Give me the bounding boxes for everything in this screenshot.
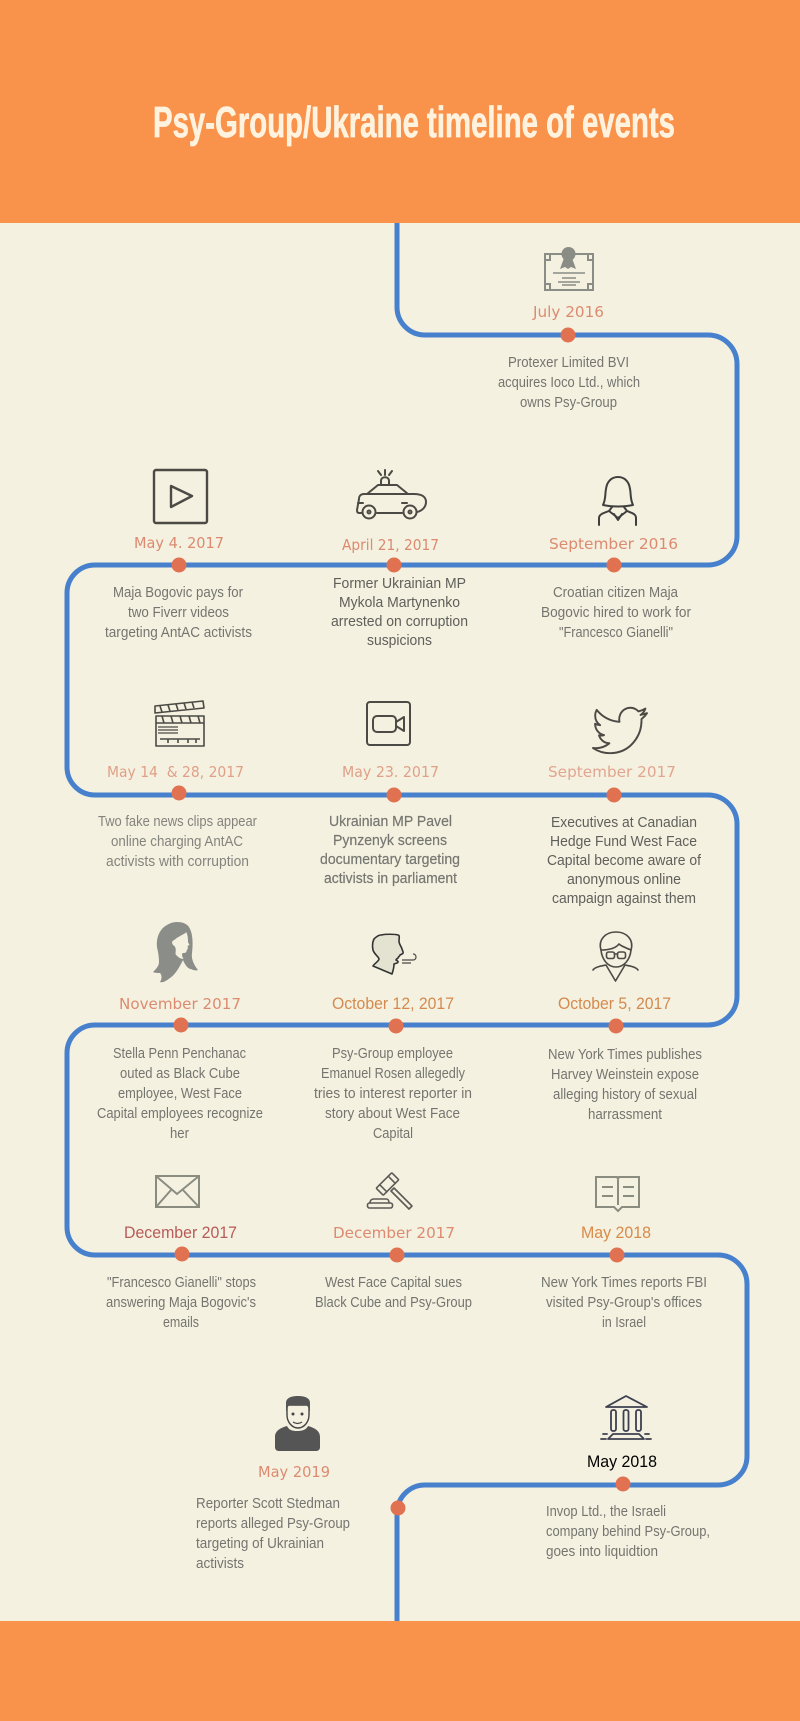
description (314, 1046, 472, 1142)
date: May 2019 (258, 1463, 330, 1481)
description: her (170, 1126, 189, 1142)
description (98, 814, 257, 870)
marker (606, 788, 622, 802)
event: October 12, 2017 (314, 934, 472, 1142)
date: May 2018 (587, 1453, 657, 1471)
icon: envelope (156, 1176, 199, 1207)
marker (174, 1018, 188, 1032)
description: Capital (373, 1126, 413, 1142)
description (331, 576, 468, 649)
description: Two fake news clips appear (98, 814, 257, 830)
date: October 12, 2017 (332, 995, 454, 1013)
icon: open book (596, 1177, 639, 1211)
description: reports alleged Psy-Group (196, 1516, 350, 1532)
description: Harvey Weinstein expose (551, 1067, 699, 1083)
date: July 2016 (532, 303, 604, 321)
marker (174, 1246, 190, 1262)
event: May 14 & 28, 2017 (98, 701, 257, 870)
description (548, 1047, 702, 1123)
description: targeting of Ukrainian (196, 1536, 324, 1552)
marker (608, 1018, 624, 1034)
description (546, 1504, 710, 1560)
description: campaign against them (552, 891, 696, 907)
icon: clapperboard (155, 701, 204, 746)
date: May 14 & 28, 2017 (107, 763, 244, 781)
description (320, 814, 460, 887)
description: Croatian citizen Maja (553, 585, 679, 601)
description: Ukrainian MP Pavel (329, 814, 452, 830)
description: anonymous online (567, 872, 681, 888)
description: suspicions (367, 633, 432, 649)
marker (172, 558, 186, 572)
description: Protexer Limited BVI (508, 355, 629, 371)
icon: police car (357, 470, 426, 518)
description: acquires Ioco Ltd., which (498, 375, 640, 391)
description: targeting AntAC activists (105, 625, 252, 641)
timeline path (67, 223, 747, 1621)
icon: video camera (367, 702, 410, 745)
description (97, 1046, 263, 1142)
description: New York Times publishes (548, 1047, 702, 1063)
description: online charging AntAC (111, 834, 243, 850)
description: Maja Bogovic pays for (113, 585, 243, 601)
date: December 2017 (124, 1224, 237, 1242)
description: Hedge Fund West Face (550, 834, 697, 850)
description: Emanuel Rosen allegedly (321, 1066, 466, 1082)
icon: woman (599, 477, 636, 525)
description: company behind Psy-Group, (546, 1524, 710, 1540)
description: outed as Black Cube (120, 1066, 240, 1082)
description: Executives at Canadian (551, 815, 697, 831)
icon: man (275, 1396, 320, 1451)
date: September 2017 (548, 763, 676, 781)
marker (172, 786, 186, 800)
description: answering Maja Bogovic's (106, 1295, 256, 1311)
marker (386, 788, 402, 802)
description (541, 1275, 707, 1331)
header band (0, 0, 800, 223)
event: December 2017 (lawsuit) (315, 1173, 472, 1311)
description: documentary targeting (320, 852, 460, 868)
marker (390, 1248, 404, 1262)
icon: man with glasses (593, 932, 638, 981)
description (106, 1275, 256, 1331)
event: December 2017 (Gianelli) (106, 1176, 256, 1331)
description: two Fiverr videos (128, 605, 229, 621)
icon: talking head (373, 934, 416, 974)
description: arrested on corruption (331, 614, 468, 630)
date: September 2016 (549, 535, 678, 553)
description (196, 1496, 350, 1572)
event: October 5, 2017 (548, 932, 702, 1123)
description: Capital employees recognize (97, 1106, 263, 1122)
description (105, 585, 252, 641)
icon: certificate (545, 247, 593, 290)
description: alleging history of sexual (553, 1087, 697, 1103)
description: "Francesco Gianelli" stops (107, 1275, 256, 1291)
date: April 21, 2017 (342, 536, 439, 554)
icon: woman silhouette (153, 922, 198, 982)
description (315, 1275, 472, 1311)
description: Mykola Martynenko (339, 595, 460, 611)
description: Bogovic hired to work for (541, 605, 691, 621)
event: May 2019 (196, 1396, 406, 1572)
marker (560, 328, 576, 342)
date: October 5, 2017 (558, 995, 671, 1013)
event: May 23, 2017 (320, 702, 460, 887)
event: April 21, 2017 (331, 470, 468, 649)
description: visited Psy-Group's offices (546, 1295, 702, 1311)
marker (606, 558, 622, 572)
description: Pynzenyk screens (333, 833, 447, 849)
marker (390, 1500, 406, 1516)
description: Stella Penn Penchanac (113, 1046, 246, 1062)
description: activists in parliament (324, 871, 457, 887)
description (541, 585, 691, 641)
marker (616, 1476, 630, 1492)
description: West Face Capital sues (325, 1275, 462, 1291)
icon: play button (154, 470, 207, 523)
date: May 4. 2017 (134, 534, 224, 552)
description: Invop Ltd., the Israeli (546, 1504, 666, 1520)
event: May 2018 (FBI) (541, 1177, 707, 1331)
marker (388, 1018, 404, 1034)
description: Reporter Scott Stedman (196, 1496, 340, 1512)
description: story about West Face (325, 1106, 460, 1122)
icon: gavel (368, 1173, 412, 1209)
description: Capital become aware of (547, 853, 702, 869)
description (547, 815, 702, 907)
description: tries to interest reporter in (314, 1086, 472, 1102)
marker (386, 558, 402, 572)
description: activists (196, 1556, 244, 1572)
event: May 2018 (Invop) (546, 1396, 710, 1560)
marker (610, 1248, 624, 1262)
description: activists with corruption (106, 854, 249, 870)
event: May 4, 2017 (105, 470, 252, 641)
icon: bank building (601, 1396, 651, 1439)
description: Psy-Group employee (332, 1046, 453, 1062)
description: New York Times reports FBI (541, 1275, 707, 1291)
date: December 2017 (333, 1224, 455, 1242)
description (498, 355, 640, 411)
description: Black Cube and Psy-Group (315, 1295, 472, 1311)
description: employee, West Face (118, 1086, 242, 1102)
date: May 23. 2017 (342, 763, 439, 781)
event: September 2017 (547, 708, 702, 907)
description: Former Ukrainian MP (333, 576, 466, 592)
icon: twitter bird (593, 708, 647, 753)
footer band (0, 1621, 800, 1721)
description: harrassment (588, 1107, 662, 1123)
event: November 2017 (97, 922, 263, 1142)
event: July 2016 (498, 247, 640, 411)
event: September 2016 (541, 477, 691, 641)
description: emails (163, 1315, 199, 1331)
description: in Israel (602, 1315, 646, 1331)
date: November 2017 (119, 995, 241, 1013)
description: goes into liquidtion (546, 1544, 658, 1560)
date: May 2018 (581, 1224, 651, 1242)
description: owns Psy-Group (520, 395, 617, 411)
description: "Francesco Gianelli" (559, 625, 673, 641)
